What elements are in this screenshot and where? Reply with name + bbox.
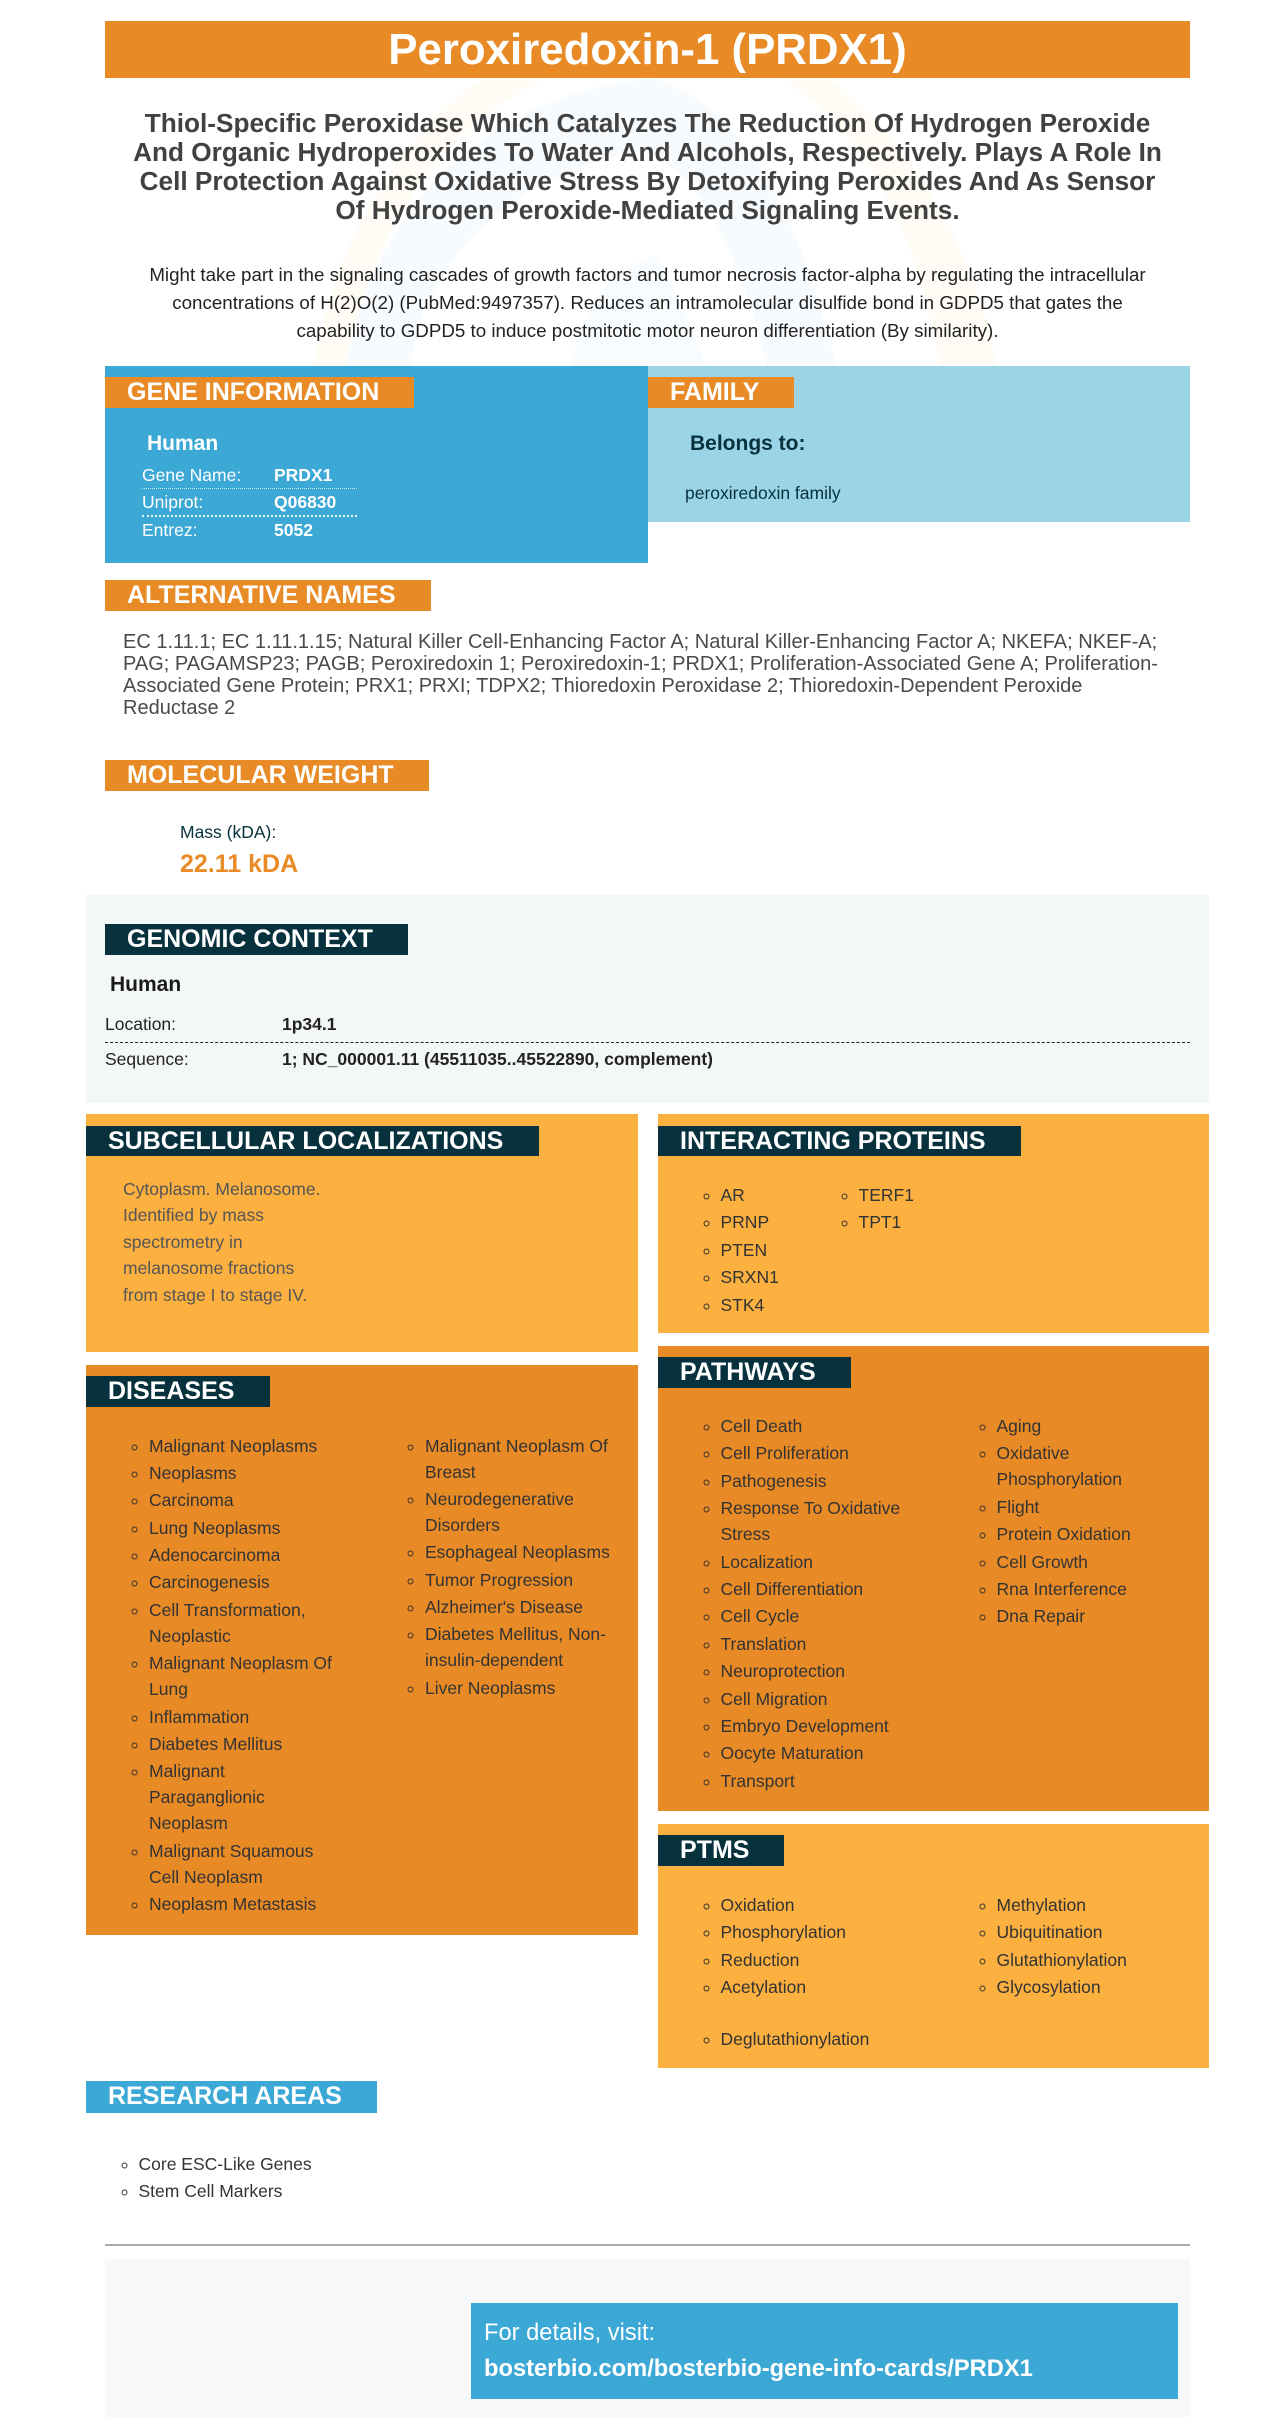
heading: molecular weight: MOLECULAR WEIGHT [127, 761, 394, 789]
disease list column 1: Neoplasm [149, 1813, 228, 1833]
description paragraph: capability to GDPD5 to induce postmitotic motor neuron differentiation (By similarity). [296, 320, 999, 341]
protein list column 1: PRNP [720, 1212, 769, 1232]
disease list column 1: Lung [149, 1679, 188, 1699]
disease list column 2: Breast [425, 1462, 476, 1482]
alternative names text: Associated Gene Protein; PRX1; PRXI; TDPX2; Thioredoxin Peroxidase 2; Thioredoxin-Dependent Peroxide [123, 675, 1082, 697]
pathway list column 1: Cell Proliferation [720, 1443, 849, 1463]
ptm list column 1 [704, 1895, 869, 2049]
research areas list: Stem Cell Markers [138, 2181, 282, 2201]
disease list column 2: insulin-dependent [425, 1650, 563, 1670]
disease list column 2: Malignant Neoplasm Of [425, 1436, 608, 1456]
location row: 1p34.1 [282, 1014, 336, 1034]
disease list column 1: Malignant Squamous [149, 1841, 313, 1861]
disease list column 1: Cell Transformation, [149, 1600, 306, 1620]
pathway list column 1: Cell Cycle [720, 1606, 799, 1626]
panel: interacting proteins [658, 1114, 1209, 1333]
pathway list column 2: Dna Repair [996, 1606, 1085, 1626]
pathway list column 2: Cell Growth [996, 1552, 1088, 1572]
heading: family: FAMILY [670, 378, 759, 406]
pathway list column 1: Localization [720, 1552, 813, 1572]
research areas list: Core ESC-Like Genes [138, 2154, 312, 2174]
heading: family [648, 377, 794, 408]
ptm list column 1: Oxidation [720, 1895, 794, 1915]
heading: diseases [86, 1376, 270, 1407]
description paragraph: concentrations of H(2)O(2) (PubMed:9497357). Reduces an intramolecular disulfide bond in GDPD5 that gates the [172, 292, 1123, 313]
ptm list column 2 [980, 1895, 1127, 1997]
sequence row: Sequence: [105, 1049, 189, 1069]
visit label: For details, visit: [484, 2320, 655, 2346]
subtitle: protein function summary: Of Hydrogen Peroxide-Mediated Signaling Events. [335, 194, 960, 224]
disease list column 1: Neoplasms [149, 1463, 237, 1483]
disease list column 2: Disorders [425, 1515, 500, 1535]
subtitle: protein function summary [133, 108, 1162, 224]
species label: Human [110, 973, 181, 996]
description paragraph: Might take part in the signaling cascades of growth factors and tumor necrosis factor-alpha by regulating the intracellular [149, 264, 1146, 285]
uniprot row: Uniprot: [142, 492, 203, 512]
mass label: Mass (kDA): [180, 822, 276, 842]
localization text: Cytoplasm. Melanosome. [123, 1178, 320, 1198]
disease list column 1: Adenocarcinoma [149, 1545, 280, 1565]
mass value: 22.11 kDA [180, 850, 298, 878]
family value: peroxiredoxin family [685, 483, 841, 503]
panel: footer [105, 2259, 1190, 2417]
pathway list column 1: Transport [720, 1771, 795, 1791]
species label: Human [147, 432, 218, 455]
uniprot row: Q06830 [274, 492, 336, 512]
disease list column 1: Malignant Neoplasms [149, 1436, 317, 1456]
heading: genomic context: GENOMIC CONTEXT [127, 925, 373, 953]
disease list column 2: Neurodegenerative [425, 1489, 574, 1509]
pathway list column 1: Translation [720, 1634, 806, 1654]
location row: Location: [105, 1014, 176, 1034]
ptm list column 1: Reduction [720, 1950, 799, 1970]
localization text: melanosome fractions [123, 1258, 294, 1278]
disease list column 1: Cell Neoplasm [149, 1867, 263, 1887]
alternative names text: PAG; PAGAMSP23; PAGB; Peroxiredoxin 1; Peroxiredoxin-1; PRDX1; Proliferation-Associated Gene A; Proliferation- [123, 653, 1158, 675]
ptm list column 2: Methylation [996, 1895, 1086, 1915]
ptm list column 2: Glycosylation [996, 1977, 1101, 1997]
panel: gene information [105, 366, 648, 563]
watermark logo [314, 78, 996, 366]
disease list column 1: Carcinoma [149, 1490, 234, 1510]
pathway list column 2: Flight [996, 1497, 1039, 1517]
subtitle: protein function summary: Cell Protection Against Oxidative Stress By Detoxifying Peroxides And As Sensor [140, 166, 1155, 196]
disease list column 1: Paraganglionic [149, 1787, 265, 1807]
gene name row: Gene Name: [142, 465, 241, 485]
title banner: Peroxiredoxin-1 (PRDX1) [388, 25, 907, 74]
panel: genomic context [86, 895, 1209, 1103]
disease list column 1 [132, 1436, 332, 1914]
disease list column 1: Neoplastic [149, 1626, 231, 1646]
heading: diseases: DISEASES [108, 1377, 234, 1405]
pathway list column 1: Cell Death [720, 1416, 802, 1436]
disease list column 2: Liver Neoplasms [425, 1678, 555, 1698]
callout: details link [471, 2303, 1178, 2399]
entrez row [142, 520, 313, 540]
localization text: from stage I to stage IV. [123, 1284, 307, 1304]
disease list column 2: Tumor Progression [425, 1570, 573, 1590]
disease list column 2 [408, 1436, 610, 1698]
pathway list column 2: Rna Interference [996, 1579, 1127, 1599]
research areas list [122, 2154, 312, 2201]
pathway list column 1: Oocyte Maturation [720, 1743, 863, 1763]
protein list column 1: AR [720, 1185, 745, 1205]
pathway list column 1: Cell Differentiation [720, 1579, 863, 1599]
heading: alternative names: ALTERNATIVE NAMES [127, 581, 396, 609]
disease list column 1: Inflammation [149, 1707, 249, 1727]
panel: ptms [658, 1824, 1209, 2068]
disease list column 1: Malignant Neoplasm Of [149, 1653, 332, 1673]
panel: subcellular localizations [86, 1114, 638, 1352]
alternative names text: EC 1.11.1; EC 1.11.1.15; Natural Killer Cell-Enhancing Factor A; Natural Killer-Enhancing Factor A; NKEFA; NKEF-A; [123, 631, 1157, 653]
sequence row: 1; NC_000001.11 (45511035..45522890, complement) [282, 1049, 713, 1069]
alternative names text: Reductase 2 [123, 697, 235, 719]
belongs to label: Belongs to: [690, 432, 806, 455]
subtitle: protein function summary: Thiol-Specific Peroxidase Which Catalyzes The Reduction Of Hydrogen Peroxide [145, 108, 1150, 138]
ptm list column 1: Phosphorylation [720, 1922, 846, 1942]
panel: family [648, 366, 1190, 522]
title banner [105, 21, 1190, 78]
protein list column 1: PTEN [720, 1240, 767, 1260]
heading: ptms: PTMS [680, 1836, 749, 1864]
ptm list column 1: Deglutathionylation [720, 2029, 869, 2049]
disease list column 1: Neoplasm Metastasis [149, 1894, 316, 1914]
localization text: Identified by mass [123, 1205, 264, 1225]
protein list column 1: SRXN1 [720, 1267, 779, 1287]
pathway list column 2 [980, 1416, 1131, 1626]
gene name row: PRDX1 [274, 465, 332, 485]
entrez row: Entrez: [142, 520, 197, 540]
pathway list column 1 [704, 1416, 900, 1791]
url: bosterbio.com/bosterbio-gene-info-cards/PRDX1 [484, 2356, 1033, 2382]
pathway list column 1: Neuroprotection [720, 1661, 845, 1681]
heading: research areas: RESEARCH AREAS [108, 2082, 342, 2110]
protein list column 2 [842, 1185, 914, 1232]
subtitle: protein function summary: And Organic Hydroperoxides To Water And Alcohols, Respectively. Plays A Role In [133, 136, 1162, 166]
pathway list column 1: Response To Oxidative [720, 1498, 900, 1518]
description paragraph [149, 264, 1146, 341]
location row [105, 1012, 1190, 1043]
uniprot row [142, 490, 357, 517]
protein list column 1: STK4 [720, 1295, 764, 1315]
heading: gene information: GENE INFORMATION [127, 378, 379, 406]
pathway list column 2: Phosphorylation [996, 1469, 1122, 1489]
pathway list column 2: Protein Oxidation [996, 1524, 1131, 1544]
heading: pathways: PATHWAYS [680, 1358, 816, 1386]
localization text: spectrometry in [123, 1232, 243, 1252]
disease list column 1: Diabetes Mellitus [149, 1734, 282, 1754]
disease list column 2: Alzheimer's Disease [425, 1597, 583, 1617]
ptm list column 2: Glutathionylation [996, 1950, 1127, 1970]
entrez row: 5052 [274, 520, 313, 540]
protein list column 1 [704, 1185, 779, 1315]
heading: subcellular localizations: SUBCELLULAR LOCALIZATIONS [108, 1127, 503, 1155]
pathway list column 1: Pathogenesis [720, 1471, 827, 1491]
alternative names text [123, 631, 1158, 719]
pathway list column 1: Embryo Development [720, 1716, 889, 1736]
pathway list column 2: Oxidative [996, 1443, 1069, 1463]
disease list column 2: Esophageal Neoplasms [425, 1542, 610, 1562]
protein list column 2: TERF1 [858, 1185, 914, 1205]
disease list column 1: Malignant [149, 1761, 225, 1781]
ptm list column 2: Ubiquitination [996, 1922, 1103, 1942]
pathway list column 1: Cell Migration [720, 1689, 827, 1709]
disease list column 1: Lung Neoplasms [149, 1518, 280, 1538]
protein list column 2: TPT1 [858, 1212, 901, 1232]
gene name row [142, 463, 357, 489]
localization text [123, 1178, 320, 1304]
pathway list column 1: Stress [720, 1524, 770, 1544]
heading: interacting proteins: INTERACTING PROTEINS [680, 1127, 986, 1155]
ptm list column 1: Acetylation [720, 1977, 806, 1997]
disease list column 1: Carcinogenesis [149, 1572, 270, 1592]
disease list column 2: Diabetes Mellitus, Non- [425, 1624, 606, 1644]
pathway list column 2: Aging [996, 1416, 1041, 1436]
panel: pathways [658, 1346, 1209, 1811]
panel: diseases [86, 1365, 638, 1935]
heading: pathways [658, 1357, 851, 1388]
heading: ptms [658, 1835, 784, 1866]
